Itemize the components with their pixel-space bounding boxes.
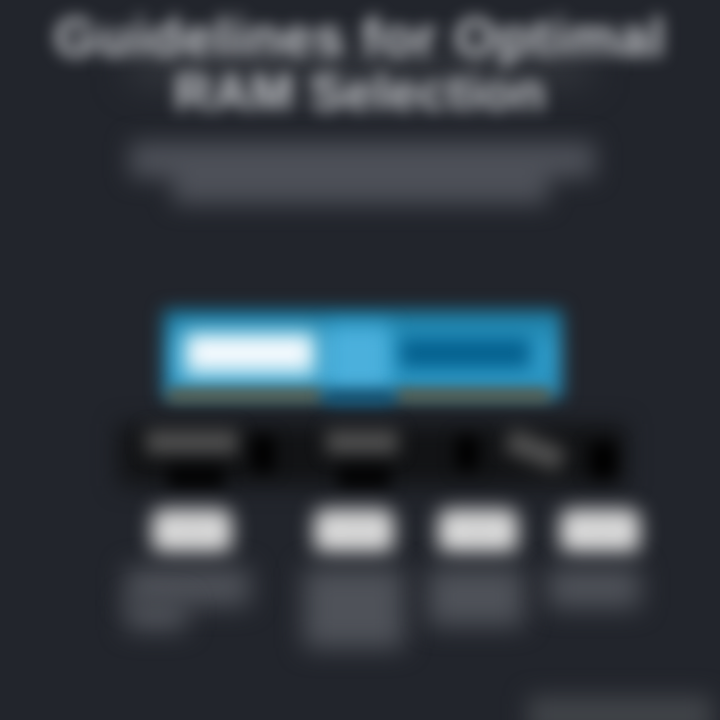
RAM module illustration [150,298,576,414]
description 3 [428,568,524,626]
column heading: speed [504,428,566,472]
black accent: first column [168,468,224,486]
description 3: Faster clocks help demanding apps [433,568,519,612]
option pill 4: CL16 [583,523,617,539]
subtitle block [121,132,604,214]
title halo [130,56,590,82]
subtitle last line: with your system [305,178,416,195]
black accent: left gap [252,436,274,472]
option pill 2: 16 GB [334,523,374,539]
black accent: second column [338,468,390,486]
column heading: type: DDR Type [164,435,220,449]
option pill 3 [438,509,518,553]
description 1: Match the type your motherboard supports [129,568,247,597]
dark band behind column headings [118,424,626,486]
description 4: Lower latency is better [551,568,637,597]
dark blue label [400,338,530,368]
title line 1: Guidelines for Optimal [54,6,666,68]
option pill 2 [314,509,394,553]
description 1 last line: first [146,600,166,614]
gold contact strip right [396,389,550,402]
description 2: Choose enough memory for your daily workload [310,568,398,612]
column heading: speed: Speed [516,437,554,463]
option pill 3: 3200 [462,523,494,539]
footer watermark: Source: guide [583,699,657,713]
description 1 last line [126,600,186,630]
option pill 1 [152,509,232,553]
black accent: third gap [456,436,478,470]
description 2 [304,568,404,648]
module body [164,310,562,398]
column heading: capacity [326,430,398,454]
white label glow [182,330,318,380]
subtitle last line [173,174,548,204]
black accent: right side [590,442,616,478]
module notch [324,390,394,406]
description 4 [548,568,640,608]
option pill 1: DDR4 [173,523,211,539]
column heading: capacity: Capacity [337,435,387,449]
centre highlight [326,326,390,392]
column heading: type [146,430,238,454]
footer watermark [528,696,712,720]
title line 2: RAM Selection [174,64,546,122]
gold contact strip left [168,389,322,402]
subtitle upper lines: Choosing the right memory depends on workload, capacity, speed and compatibility [143,142,582,177]
option pill 4 [560,509,640,553]
white label [192,340,308,366]
title [45,6,674,122]
